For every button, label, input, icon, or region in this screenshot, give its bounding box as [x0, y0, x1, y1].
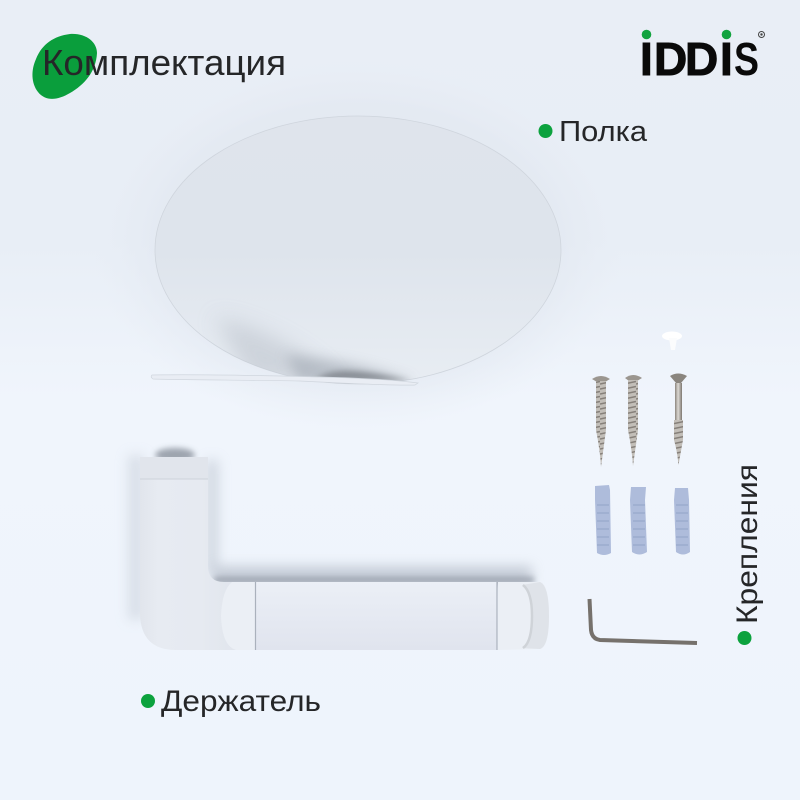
holder right end [498, 582, 549, 650]
screw 2 [625, 375, 642, 466]
anchor 3 [674, 488, 690, 554]
holder inner shadow [206, 460, 218, 575]
screw 1 [592, 376, 610, 467]
shelf bracket edge [151, 375, 418, 385]
label: Крепления: Крепления [731, 464, 764, 624]
holder end recess [522, 582, 549, 649]
holder L arm [140, 457, 260, 650]
screw 3 [670, 374, 687, 465]
holder bar contact shadow [214, 577, 534, 583]
logo: IDDIS: IDDI [640, 33, 733, 85]
anchor 2 [630, 487, 647, 554]
holder left shadow [128, 455, 144, 620]
holder cap [140, 457, 208, 479]
holder left collar [221, 582, 255, 650]
small white cap [662, 332, 682, 350]
holder centre bar [256, 582, 497, 650]
fasteners [590, 332, 697, 643]
label: Полка: Полка [559, 116, 648, 148]
logo: IDDIS: S [734, 33, 759, 85]
title blob [32, 34, 97, 99]
shelf halo shadow [93, 60, 623, 430]
shelf shadow on plate [215, 318, 415, 382]
hex key [590, 599, 697, 643]
shelf [151, 116, 561, 385]
anchor 1 [595, 485, 611, 555]
holder top cap shadow [155, 448, 195, 462]
title: Комплектация [42, 42, 286, 83]
holder [128, 448, 549, 650]
holder bar wide shadow [214, 566, 532, 584]
shelf plate [155, 116, 561, 384]
label: Держатель: Держатель [161, 685, 321, 718]
